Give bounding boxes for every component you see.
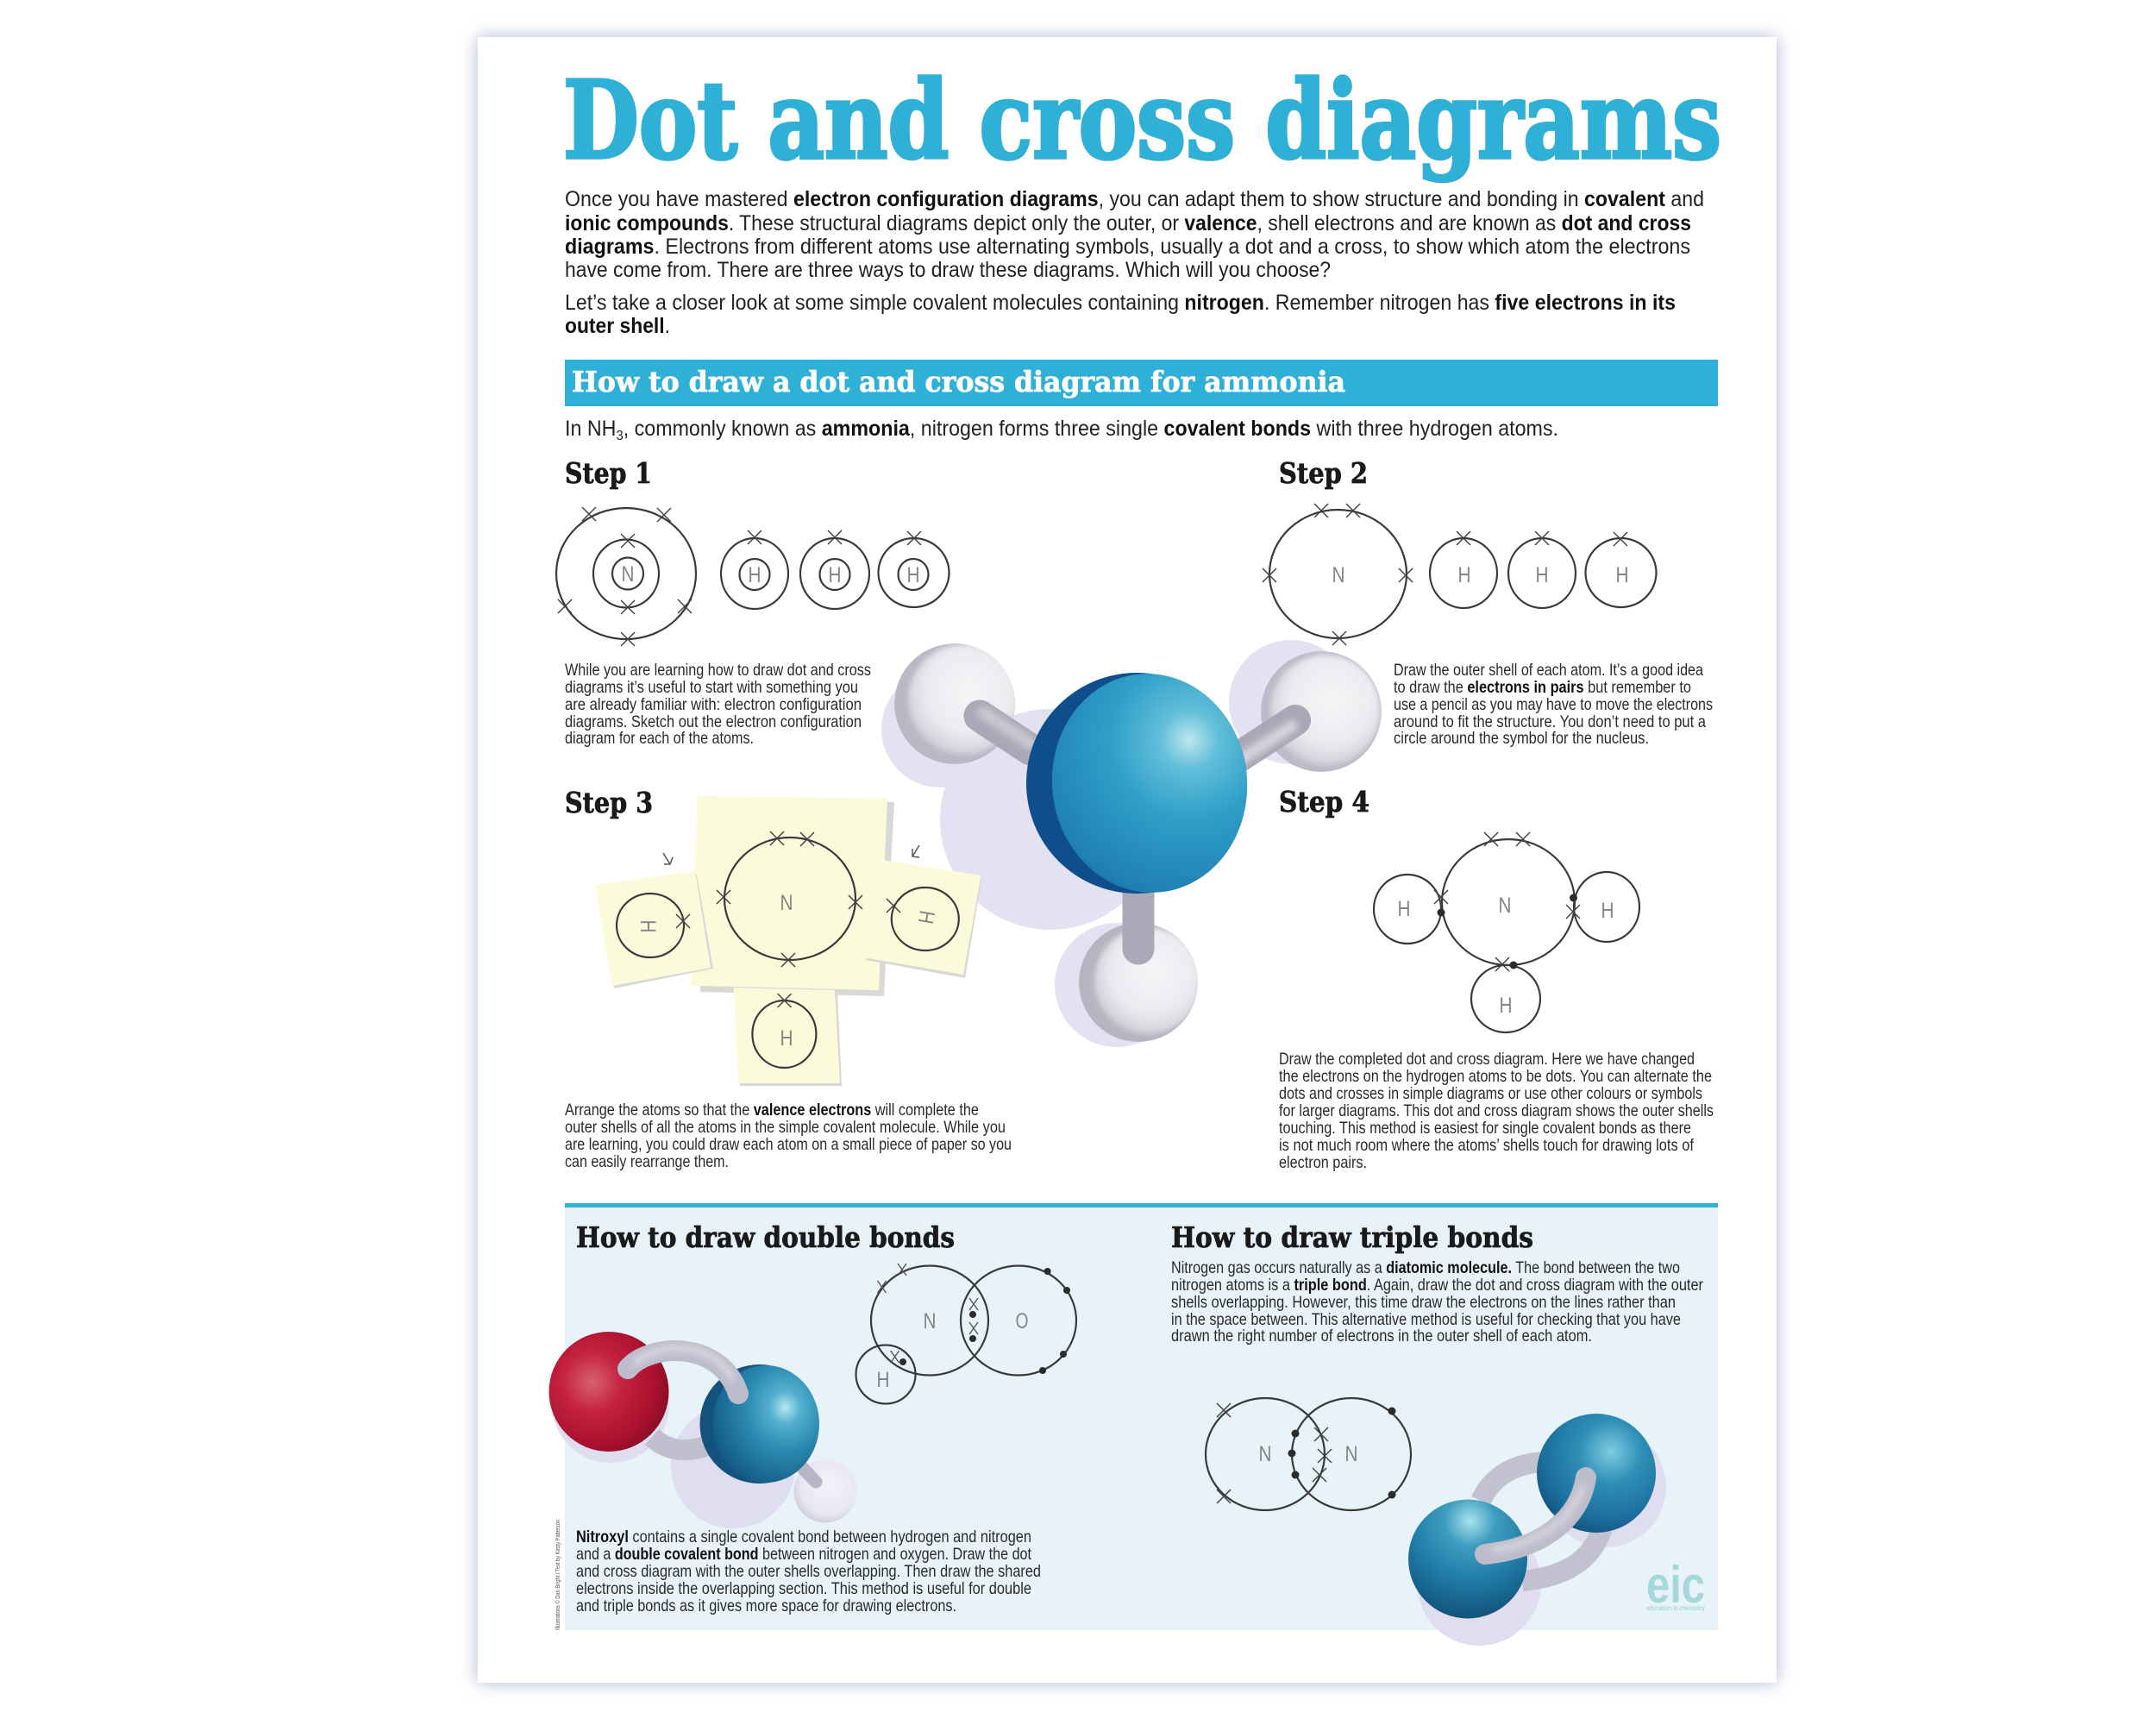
step 2 text — [1394, 661, 1713, 748]
logo: education in chemistry: education in chemistry — [1646, 1604, 1705, 1612]
hydrogen atom: bottom — [1079, 923, 1201, 1042]
bond: left — [980, 712, 1031, 750]
nitroxyl text — [576, 1527, 1041, 1615]
paper: right hydrogen — [863, 860, 981, 978]
paper: nitrogen — [691, 796, 894, 996]
step 1 electron configuration diagrams: H — [828, 563, 842, 587]
bottom panel background — [565, 1203, 1718, 1630]
step 1 text: While you are learning how to draw dot and cross — [565, 661, 871, 680]
intro text block: Let’s take a closer look at some simple covalent molecules containing nitrogen. Remember nitrogen has five electrons in its — [565, 291, 1676, 315]
section banner: ammonia: How to draw a dot and cross diagram for ammonia — [572, 365, 1345, 398]
page panel — [478, 37, 1777, 1683]
nitrogen molecule dot and cross diagram: N — [1259, 1442, 1271, 1466]
step 2 outer shell diagrams: H — [1535, 563, 1549, 587]
step 2 heading: Step 2 — [1279, 456, 1368, 490]
step 1 text: diagrams. Sketch out the electron configuration — [565, 712, 862, 731]
nitroxyl dot and cross diagram: N — [923, 1309, 937, 1333]
ammonia molecule illustration — [881, 640, 1382, 1047]
nitrogen atom — [700, 1364, 819, 1484]
front bond — [1485, 1477, 1586, 1554]
step 2 text: circle around the symbol for the nucleus. — [1394, 729, 1649, 748]
step 2 text: Draw the outer shell of each atom. It’s a good idea — [1394, 661, 1703, 680]
step 4 text: is not much room where the atoms’ shells touch for drawing lots of — [1279, 1136, 1694, 1155]
step 2 text: around to fit the structure. You don’t need to put a — [1394, 712, 1706, 731]
step 1 electron configuration diagrams: H — [749, 563, 761, 587]
step 4 text: touching. This method is easiest for single covalent bonds as there — [1279, 1119, 1691, 1138]
nitrogen atom — [1026, 664, 1258, 902]
step 1 heading: Step 1 — [565, 456, 652, 490]
triple bonds text — [1171, 1258, 1703, 1346]
back bond: top — [1481, 1462, 1544, 1501]
triple bonds text: in the space between. This alternative method is useful for checking that you have — [1171, 1310, 1681, 1329]
nitroxyl text: Nitroxyl contains a single covalent bond between hydrogen and nitrogen — [576, 1527, 1031, 1546]
step 3 text: outer shells of all the atoms in the simple covalent molecule. While you — [565, 1118, 1006, 1137]
nitroxyl dot and cross diagram: O — [1016, 1309, 1028, 1333]
hydrogen atom: upper left — [894, 643, 1018, 764]
section banner: ammonia — [565, 360, 1718, 406]
triple bonds text: shells overlapping. However, this time draw the electrons on the lines rather than — [1171, 1293, 1676, 1312]
step 2 outer shell diagrams: H — [1616, 563, 1628, 587]
step 2 outer shell diagrams — [1263, 504, 1656, 645]
step 4 completed dot and cross diagram: H — [1499, 994, 1513, 1018]
step 4 completed dot and cross diagram: H — [1397, 897, 1411, 921]
step 1 text: are already familiar with: electron configuration — [565, 695, 862, 714]
arrow: left paper — [663, 853, 673, 864]
nitrogen molecule dot and cross diagram — [1206, 1398, 1411, 1510]
hydrogen atom — [793, 1459, 857, 1523]
hydrogen atom: upper right — [1261, 651, 1382, 772]
logo: education in chemistry: eic — [1646, 1556, 1705, 1614]
upper bond — [628, 1351, 738, 1394]
bond: bottom — [1123, 888, 1154, 949]
nitroxyl text: and triple bonds as it gives more space for drawing electrons. — [576, 1596, 956, 1615]
hydrogen bond — [798, 1463, 816, 1482]
ammonia intro sentence: ammonia, nitrogen forms three single covalent bonds with three hydrogen atoms. — [822, 417, 1577, 441]
step 1 electron configuration diagrams — [556, 507, 949, 646]
intro text block — [565, 187, 1704, 338]
step 3 text: can easily rearrange them. — [565, 1152, 729, 1171]
front bond highlight — [1492, 1485, 1583, 1550]
intro text block: ionic compounds. These structural diagrams depict only the outer, or valence, shell electrons and are known as dot and cross — [565, 211, 1691, 235]
paper: nitrogen: N — [780, 891, 793, 915]
back bond: bottom — [1522, 1528, 1602, 1581]
lower nitrogen atom — [1408, 1499, 1527, 1618]
step 3 text: Arrange the atoms so that the valence electrons will complete the — [565, 1101, 979, 1120]
step 4 text: the electrons on the hydrogen atoms to be dots. You can alternate the — [1279, 1067, 1712, 1086]
triple bonds text: drawn the right number of electrons in the outer shell of each atom. — [1171, 1327, 1592, 1346]
lower bond — [652, 1437, 707, 1450]
nitroxyl molecule illustration — [548, 1332, 857, 1528]
step 2 text: to draw the electrons in pairs but remember to — [1394, 678, 1691, 697]
ammonia intro sentence: In NH — [565, 417, 620, 441]
step 4 text — [1279, 1050, 1714, 1172]
step 4 completed dot and cross diagram — [1374, 832, 1639, 1032]
step 2 text: use a pencil as you may have to move the electrons — [1394, 695, 1713, 714]
intro text block: outer shell. — [565, 314, 670, 338]
paper: bottom hydrogen: H — [780, 1026, 793, 1051]
paper: left hydrogen: H — [636, 919, 660, 933]
step 2 outer shell diagrams: H — [1457, 563, 1471, 587]
step 4 completed dot and cross diagram: N — [1499, 894, 1511, 918]
nitrogen molecule dot and cross diagram: N — [1345, 1442, 1357, 1466]
triple bonds text: Nitrogen gas occurs naturally as a diatomic molecule. The bond between the two — [1171, 1258, 1680, 1277]
step 2 outer shell diagrams: N — [1332, 563, 1345, 587]
double bonds heading: How to draw double bonds — [576, 1220, 955, 1254]
step 1 electron configuration diagrams: H — [907, 563, 919, 587]
oxygen atom — [548, 1332, 669, 1452]
nitrogen molecule illustration — [1408, 1414, 1666, 1646]
step 3 paper cut-outs — [595, 796, 981, 1086]
step 1 text: diagram for each of the atoms. — [565, 729, 754, 748]
nitroxyl text: and a double covalent bond between nitrogen and oxygen. Draw the dot — [576, 1545, 1031, 1564]
illustration credit: Illustrations © Dan Bright / Text by Kirsty Patterson — [555, 1520, 561, 1630]
paper: left hydrogen — [595, 871, 713, 988]
nitroxyl dot and cross diagram — [856, 1264, 1076, 1404]
nitroxyl dot and cross diagram: H — [876, 1368, 890, 1392]
ammonia intro sentence: 3 — [616, 429, 624, 443]
title: Dot and cross diagrams — [563, 58, 1721, 184]
step 3 text: are learning, you could draw each atom on a small piece of paper so you — [565, 1135, 1012, 1154]
step 4 text: electron pairs. — [1279, 1153, 1367, 1172]
step 1 text — [565, 661, 871, 748]
step 1 text: diagrams it’s useful to start with something you — [565, 678, 858, 697]
intro text block: Once you have mastered electron configuration diagrams, you can adapt them to show structure and bonding in covalent and — [565, 187, 1704, 211]
step 4 heading: Step 4 — [1279, 785, 1369, 819]
step 4 text: dots and crosses in simple diagrams or use other colours or symbols — [1279, 1084, 1702, 1103]
step 4 completed dot and cross diagram: H — [1601, 899, 1614, 923]
nitroxyl bond highlight — [634, 1348, 733, 1380]
nitroxyl text: electrons inside the overlapping section. This method is useful for double — [576, 1579, 1031, 1598]
triple bonds heading: How to draw triple bonds — [1171, 1220, 1533, 1254]
step 1 electron configuration diagrams: N — [621, 562, 635, 586]
nitroxyl text: and cross diagram with the outer shells overlapping. Then draw the shared — [576, 1562, 1041, 1581]
bond: right — [1238, 720, 1295, 761]
step 3 text — [565, 1101, 1012, 1171]
paper: right hydrogen: H — [913, 909, 939, 925]
paper: bottom hydrogen — [734, 988, 842, 1086]
step 3 heading: Step 3 — [565, 786, 653, 819]
step 4 text: Draw the completed dot and cross diagram. Here we have changed — [1279, 1050, 1695, 1069]
ammonia intro sentence: , commonly known as — [624, 417, 822, 441]
triple bonds text: nitrogen atoms is a triple bond. Again, draw the dot and cross diagram with the outer — [1171, 1276, 1703, 1295]
upper nitrogen atom — [1537, 1414, 1656, 1533]
arrow: right paper — [912, 845, 919, 857]
step 4 text: for larger diagrams. This dot and cross diagram shows the outer shells — [1279, 1101, 1714, 1120]
intro text block: have come from. There are three ways to draw these diagrams. Which will you choose? — [565, 258, 1331, 282]
intro text block: diagrams. Electrons from different atoms use alternating symbols, usually a dot and a cross, to show which atom the electrons — [565, 235, 1690, 259]
